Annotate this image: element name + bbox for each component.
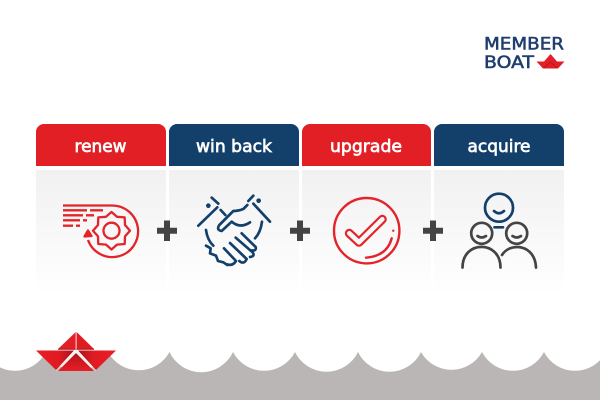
panel body: upgrade	[302, 170, 431, 295]
heading: acquire: acquire	[468, 137, 530, 156]
plus sign 3	[423, 220, 443, 241]
panel: renew	[36, 124, 166, 295]
panel: upgrade	[302, 124, 431, 295]
heading: win back: win back	[196, 137, 272, 156]
panel body: renew	[36, 170, 166, 295]
paper boat	[36, 332, 116, 371]
logo boat icon	[536, 54, 564, 68]
plus sign 1	[157, 220, 177, 241]
panel: acquire	[434, 124, 564, 295]
boat sail	[58, 332, 76, 349]
plus sign 2	[290, 220, 310, 241]
logo wordmark: MEMBER	[484, 33, 564, 53]
icon: handshake	[198, 196, 270, 265]
heading: renew: renew	[74, 137, 126, 156]
panel body: win back	[169, 170, 299, 295]
boat hull	[36, 350, 74, 370]
icon: three people	[462, 194, 536, 268]
tab: win back	[169, 124, 299, 166]
logo wordmark: BOAT	[484, 52, 535, 72]
panel: win back	[169, 124, 299, 295]
tab: upgrade	[302, 124, 431, 166]
logo: Member Boat	[484, 33, 564, 72]
logo wordmark	[484, 33, 564, 72]
panel body: acquire	[434, 170, 564, 295]
tab: acquire	[434, 124, 564, 166]
icon: check mark in circle	[334, 198, 399, 263]
waves	[0, 352, 600, 400]
icon: gear with circular arrow	[63, 205, 138, 257]
tab: renew	[36, 124, 166, 166]
heading: upgrade: upgrade	[330, 137, 402, 156]
